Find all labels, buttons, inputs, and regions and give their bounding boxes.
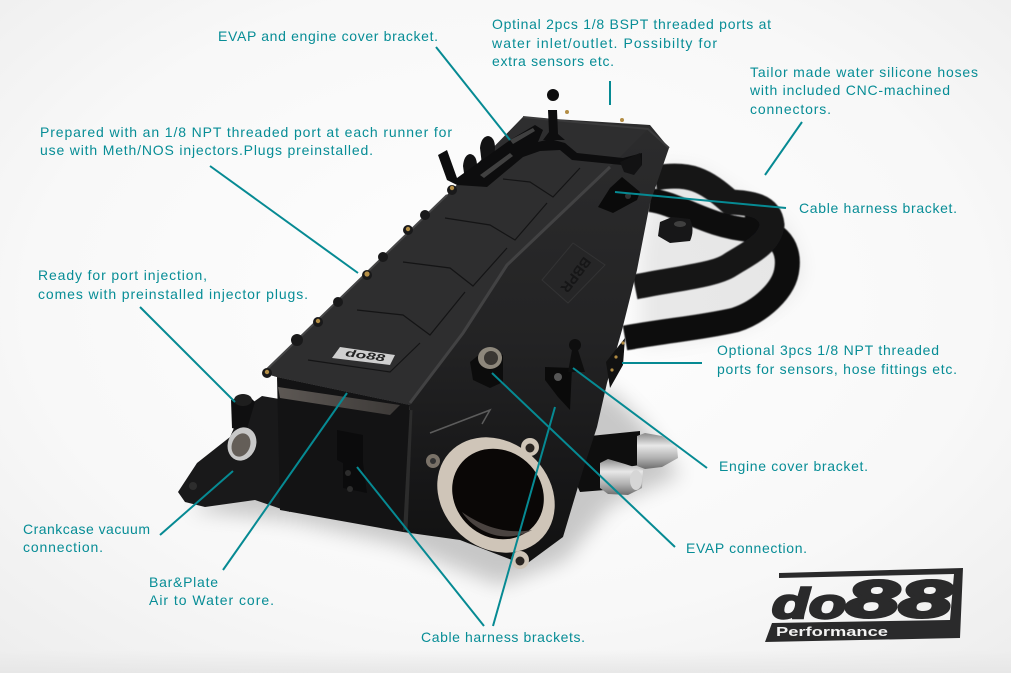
main body: [263, 117, 669, 565]
crankcase connection housing: [178, 394, 290, 512]
label: crankcase vacuum: Crankcase vacuum: [23, 521, 150, 537]
welded seams: [263, 117, 669, 530]
top cover plate: [263, 117, 648, 405]
label: 2pcs BSPT ports: Optinal 2pcs 1/8 BSPT threaded ports at: [492, 16, 771, 32]
hose mounting lug: [658, 217, 692, 243]
label: EVAP and engine cover bracket: EVAP and engine cover bracket.: [218, 28, 438, 44]
water outlet fittings: [570, 431, 678, 495]
label: engine cover bracket: Engine cover bracket.: [719, 458, 868, 474]
upper mounting bracket: [438, 89, 642, 187]
label: silicone hoses: with included CNC-machined: [749, 82, 950, 98]
label: EVAP connection: EVAP connection.: [686, 540, 807, 556]
crankcase fitting: [223, 423, 261, 465]
label: NPT port at runners: Prepared with an 1/8 NPT threaded port at each runner for: [40, 124, 452, 140]
manifold product photo illustration: [178, 89, 801, 585]
label: 2pcs BSPT ports: water inlet/outlet. Possibilty for: [491, 35, 717, 51]
do88 badge: do88: [345, 348, 386, 365]
core top strip: [278, 387, 400, 415]
label: 2pcs BSPT ports: extra sensors etc.: [492, 53, 614, 69]
label: crankcase vacuum: connection.: [23, 539, 103, 555]
label: silicone hoses: Tailor made water silicone hoses: [750, 64, 978, 80]
EVAP port: [470, 347, 503, 388]
label: 3pcs NPT ports: Optional 3pcs 1/8 NPT threaded: [717, 342, 939, 358]
label: silicone hoses: connectors.: [750, 101, 831, 117]
do88 Performance logo: Performance: [776, 624, 888, 639]
do88 Performance logo: [765, 568, 963, 642]
label: air to water core: Air to Water core.: [149, 592, 274, 608]
BBPR embossed mark: BBPR: [558, 254, 594, 296]
injector plugs: [262, 185, 457, 378]
do88 Performance logo: do: [772, 580, 846, 627]
shadow: [190, 165, 801, 585]
front core face: [277, 377, 410, 532]
label: 3pcs NPT ports: ports for sensors, hose fittings etc.: [717, 361, 957, 377]
label: port injection: Ready for port injection,: [38, 267, 207, 283]
do88 badge: [332, 347, 395, 365]
leader lines: [140, 47, 802, 626]
throttle flange: [414, 413, 578, 577]
label: cable harness brackets: Cable harness brackets.: [421, 629, 585, 645]
core bracket: [337, 430, 367, 493]
engine cover bracket lower: [545, 339, 585, 410]
label: NPT port at runners: use with Meth/NOS injectors.Plugs preinstalled.: [40, 142, 373, 158]
sensor ports: [606, 338, 625, 388]
label: port injection: comes with preinstalled injector plugs.: [38, 286, 308, 302]
label: cable harness bracket: Cable harness bracket.: [799, 200, 957, 216]
silicone hoses: [625, 176, 787, 338]
do88 Performance logo: 88: [846, 571, 952, 629]
cable harness bracket upper: [598, 153, 642, 213]
stamped panel grooves: [308, 168, 580, 372]
label: air to water core: Bar&Plate: [149, 574, 218, 590]
BBPR embossed mark: [542, 243, 605, 303]
